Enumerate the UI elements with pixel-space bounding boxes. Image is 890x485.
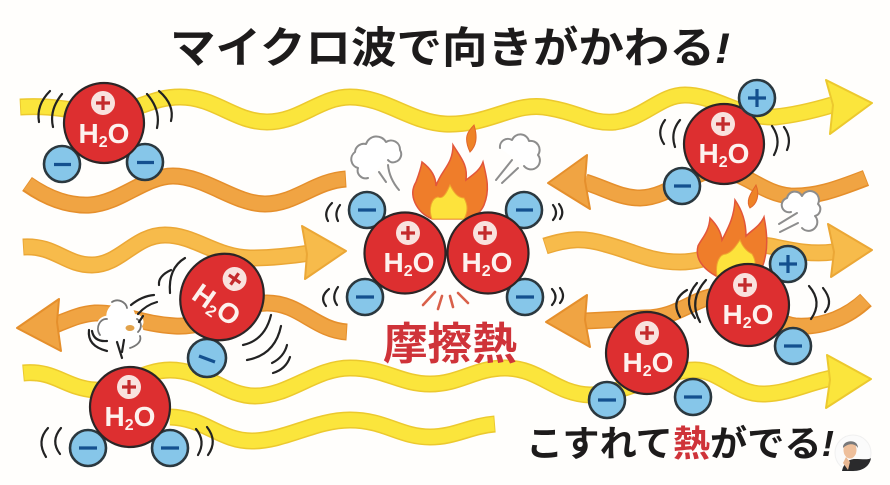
molecule: tilted left: O [211, 294, 246, 332]
molecule pair: center colliding: H [462, 247, 482, 278]
motion lines: center molecules [323, 203, 563, 306]
molecule pair: center colliding: 2 [482, 263, 491, 280]
caption: heat from rubbing: こすれて熱がでる! [526, 423, 834, 464]
wave band: bottom yellow [170, 417, 495, 441]
label: friction heat: 摩擦熱 [383, 320, 517, 369]
molecule: top right: O [728, 138, 749, 169]
wave arrow: top yellow rightward [20, 80, 872, 134]
molecule: top left: O [108, 118, 129, 149]
molecule: lower right back [707, 246, 811, 364]
molecule: top right: 2 [719, 154, 728, 171]
wave arrow: lower left orange leftward [17, 299, 347, 351]
molecule pair: center colliding: O [491, 247, 512, 278]
wave arrow: upper right orange leftward [548, 155, 866, 209]
icon: impact puff [89, 295, 157, 358]
molecule: top left: 2 [99, 134, 108, 151]
molecule: lower right back: 2 [743, 315, 752, 332]
motion lines: tilted molecule [159, 258, 290, 373]
wave arrow: lower yellow rightward [23, 355, 871, 408]
icon: steam cloud left [351, 136, 401, 190]
molecule: top right [664, 80, 775, 204]
molecule: lower right back: O [752, 299, 773, 330]
molecule: bottom left: O [134, 401, 155, 432]
icon: right flame [697, 185, 767, 278]
wave arrow: middle right orange rightward [545, 224, 872, 277]
icon: steam cloud far right [779, 191, 820, 232]
molecule: lower right front: 2 [643, 363, 652, 380]
molecule: bottom left [70, 367, 188, 466]
molecule: bottom left: H [105, 401, 125, 432]
molecule: lower right front [589, 312, 711, 418]
wave arrow: middle left orange rightward [23, 226, 346, 279]
motion lines: lower right molecules [676, 280, 829, 322]
motion lines: top left molecule [38, 91, 172, 128]
motion lines: top right molecule [660, 120, 789, 155]
molecule: top left: H [79, 118, 99, 149]
icon: center flame [413, 125, 487, 219]
icon: presenter avatar [835, 435, 871, 471]
molecule: top right: H [699, 138, 719, 169]
molecule: lower right back: H [723, 299, 743, 330]
molecule pair: center colliding: 2 [404, 263, 413, 280]
title: マイクロ波で向きがかわる ! [170, 25, 730, 73]
molecule: lower right front: O [652, 347, 673, 378]
molecule: tilted left: H [187, 277, 221, 314]
molecule: bottom left: 2 [125, 417, 134, 434]
molecule pair: center colliding [347, 192, 543, 315]
wave band: upper left orange [27, 176, 346, 205]
friction spark marks [423, 292, 468, 309]
molecule: lower right front: H [623, 347, 643, 378]
motion lines: bottom left molecule [41, 427, 213, 457]
molecule: top left [44, 83, 163, 182]
molecule: tilted left [164, 238, 280, 377]
wave arrow: lower right orange leftward [546, 295, 866, 347]
molecule pair: center colliding: H [384, 247, 404, 278]
icon: steam cloud right [496, 134, 540, 183]
molecule pair: center colliding: O [413, 247, 434, 278]
molecule: tilted left: 2 [202, 302, 219, 321]
